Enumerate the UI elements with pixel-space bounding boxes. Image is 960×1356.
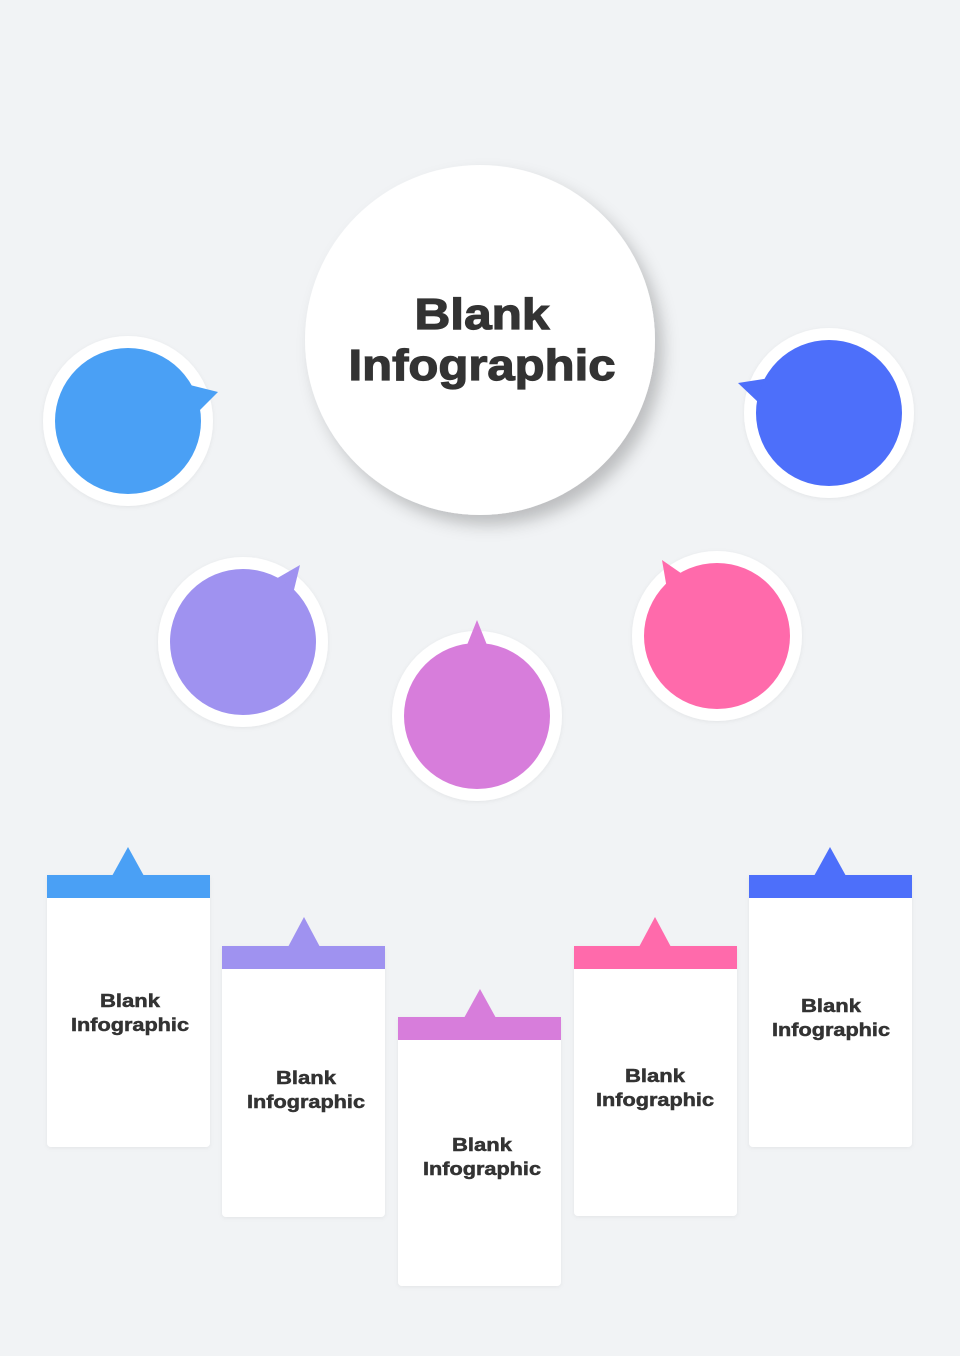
card 3	[398, 989, 561, 1286]
card 4	[574, 917, 737, 1216]
card 5	[749, 847, 912, 1147]
card 2: Infographic	[247, 1092, 365, 1112]
card 2: Blank	[276, 1068, 337, 1088]
bubble: magenta	[392, 620, 562, 801]
card 1: Blank	[100, 991, 161, 1011]
card 2	[222, 917, 385, 1217]
card 1: Infographic	[71, 1015, 189, 1035]
card 4: Blank	[625, 1066, 686, 1086]
bubble: blue left	[43, 336, 218, 506]
card 3: Infographic	[423, 1159, 541, 1179]
card 5: Blank	[801, 996, 862, 1016]
card 5: Infographic	[772, 1020, 890, 1040]
bubble: blue right	[738, 328, 914, 498]
title circle: Infographic	[348, 341, 616, 390]
title: Blank	[414, 290, 550, 339]
card 4: Infographic	[596, 1090, 714, 1110]
bubble: purple	[158, 557, 328, 727]
card 1	[47, 847, 210, 1147]
bubble: pink	[632, 551, 802, 721]
card 3: Blank	[452, 1135, 513, 1155]
title circle	[305, 165, 655, 515]
